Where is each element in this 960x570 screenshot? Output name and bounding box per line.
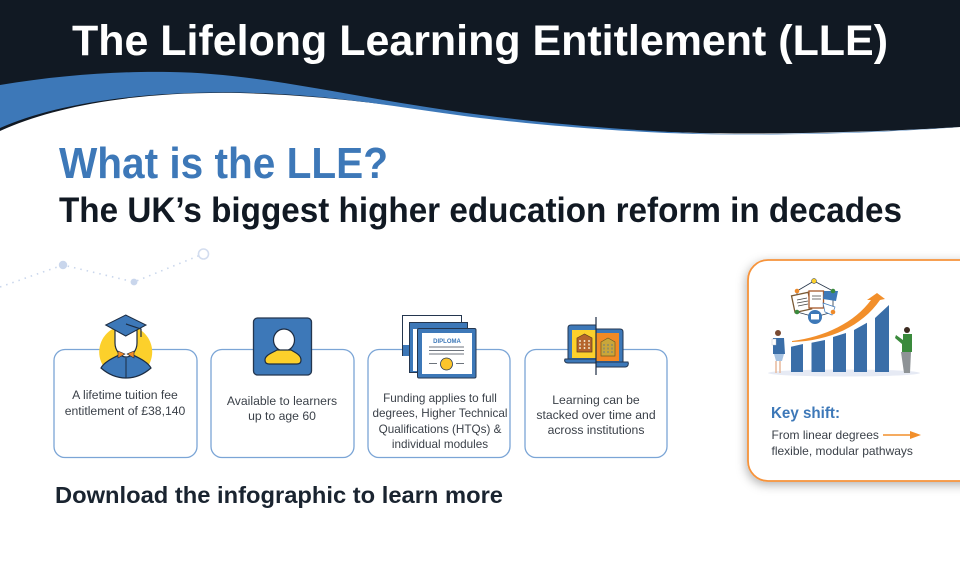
- icon: person: [254, 318, 312, 375]
- card text: individual modules: [392, 438, 488, 451]
- card text: Available to learners: [227, 394, 337, 408]
- card text: Funding applies to full: [383, 392, 497, 405]
- card text: across institutions: [548, 423, 644, 437]
- icon: graduate: [99, 315, 152, 378]
- left building: [577, 334, 592, 352]
- key shift label: Key shift:: [771, 405, 840, 422]
- heading: What is the LLE?: What is the LLE?: [59, 139, 388, 188]
- header banner: [0, 0, 960, 135]
- card text: up to age 60: [248, 409, 316, 423]
- chart illustration: [768, 278, 920, 376]
- card text: Qualifications (HTQs) &: [379, 423, 502, 436]
- card text: degrees, Higher Technical: [373, 407, 507, 420]
- growth arrow: [792, 293, 885, 342]
- title: The Lifelong Learning Entitlement (LLE): [72, 17, 888, 65]
- key shift text: flexible, modular pathways: [772, 444, 913, 458]
- network of documents: [792, 278, 838, 324]
- card text: A lifetime tuition fee: [72, 388, 178, 402]
- icon: diplomas: DIPLOMA: [433, 339, 461, 345]
- man: [895, 327, 912, 373]
- card 1: lifetime entitlement: [54, 315, 197, 458]
- card text: Learning can be: [552, 393, 640, 407]
- card 3: funding: [368, 316, 510, 458]
- card 4: stacking: [525, 317, 667, 458]
- right building: [601, 338, 615, 356]
- decorative dotted line: [0, 249, 208, 287]
- card text: entitlement of £38,140: [65, 404, 186, 418]
- icon: split laptop: [565, 317, 628, 375]
- card 2: age limit: [211, 318, 354, 458]
- icon: diplomas: [402, 316, 476, 378]
- call to action: Download the infographic to learn more: [55, 482, 503, 508]
- key shift text: From linear degrees: [772, 428, 879, 442]
- arrow: [883, 431, 921, 439]
- bars: [791, 305, 889, 372]
- woman: [772, 330, 785, 373]
- panel: key shift: [748, 260, 960, 481]
- subheading: The UK’s biggest higher education reform in decades: [59, 191, 902, 230]
- card text: stacked over time and: [536, 408, 656, 422]
